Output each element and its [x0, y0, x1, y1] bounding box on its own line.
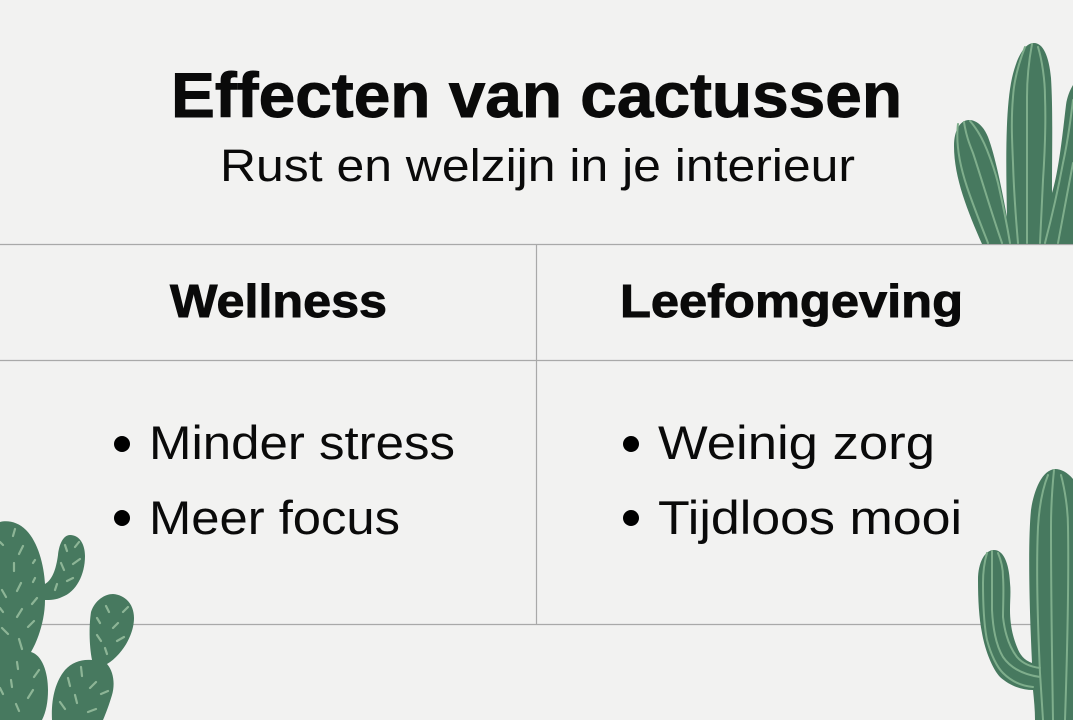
column heading: Wellness: Wellness [170, 275, 387, 327]
list: Wellness: Minder stress [149, 416, 455, 469]
subtitle: Rust en welzijn in je interieur [220, 140, 855, 191]
list: Leefomgeving: Tijdloos mooi [658, 491, 962, 544]
icon: cactus top right [954, 43, 1073, 244]
list: Wellness [114, 416, 455, 544]
icon: prickly pear cactus bottom left [0, 521, 134, 720]
title: Effecten van cactussen [171, 61, 902, 131]
icon: saguaro cactus bottom right [978, 469, 1073, 720]
list: Leefomgeving: Weinig zorg [658, 416, 935, 469]
list: Wellness: Meer focus [149, 491, 400, 544]
column heading: Leefomgeving: Leefomgeving [620, 275, 963, 327]
list: Leefomgeving [623, 416, 962, 544]
